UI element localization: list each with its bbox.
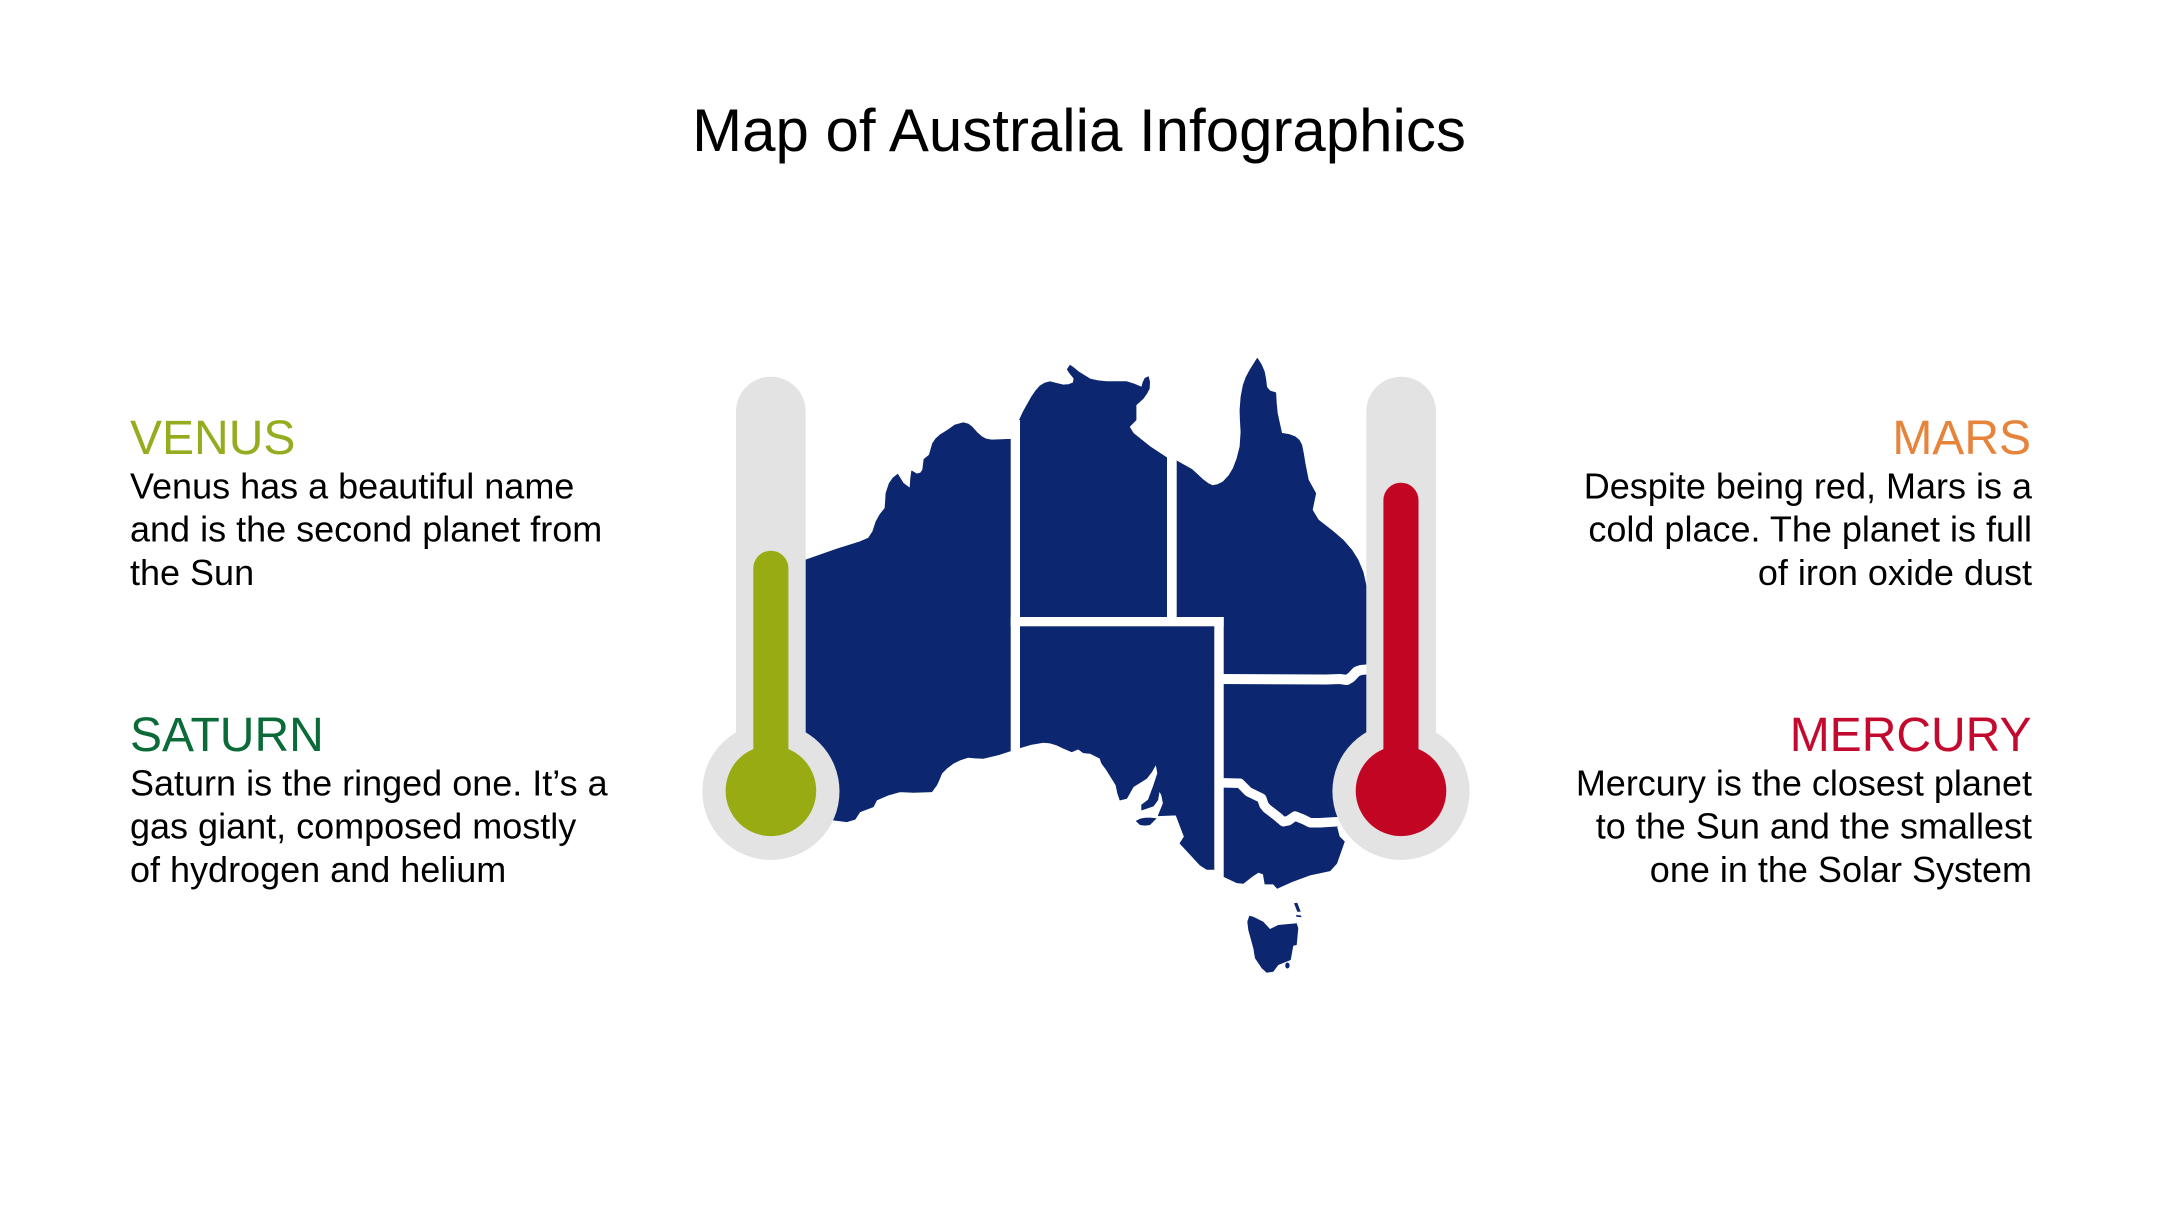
mercury bulb <box>726 746 816 836</box>
thermometer tube <box>736 377 806 827</box>
mercury bulb <box>1356 746 1446 836</box>
text block: Mercury: MERCURY <box>1790 709 2032 762</box>
text block: Mercury: Mercury is the closest planet <box>1576 762 2032 804</box>
text block: Mars: MARS <box>1892 412 2031 465</box>
text block: Venus: Venus has a beautiful name <box>130 466 574 506</box>
text block: Venus: VENUS <box>130 412 295 465</box>
thermometer: Mars / Mercury (right) <box>1332 377 1470 860</box>
map of Australia <box>790 358 1400 973</box>
thermometer: Venus / Saturn (left) <box>702 377 840 860</box>
text block: Mars <box>1584 412 2033 593</box>
mercury column <box>753 551 788 801</box>
thermometer bulb <box>1332 723 1470 860</box>
title: Map of Australia Infographics <box>692 97 1466 164</box>
text block: Mercury <box>1576 709 2032 890</box>
text block: Mars: cold place. The planet is full <box>1588 509 2032 550</box>
text block: Saturn: SATURN <box>130 709 324 762</box>
text block: Saturn: Saturn is the ringed one. It’s a <box>130 762 609 804</box>
thermometer tube <box>1366 377 1436 827</box>
text block: Saturn <box>130 709 609 890</box>
Kangaroo Island <box>1136 818 1157 826</box>
state borders <box>1011 420 1372 880</box>
text block: Venus: and is the second planet from <box>130 509 602 550</box>
text block: Mercury: one in the Solar System <box>1650 849 2032 890</box>
text block: Venus <box>130 412 602 593</box>
thermometer bulb <box>702 723 840 860</box>
text block: Mars: Despite being red, Mars is a <box>1584 466 2033 506</box>
text block: Venus: the Sun <box>130 552 254 593</box>
text block: Saturn: of hydrogen and helium <box>130 849 506 890</box>
Tasmania <box>1247 916 1298 973</box>
text block: Mars: of iron oxide dust <box>1758 552 2032 593</box>
mercury column <box>1383 483 1418 803</box>
text block: Mercury: to the Sun and the smallest <box>1596 806 2032 847</box>
mainland silhouette <box>790 358 1400 888</box>
small islands <box>1285 903 1302 969</box>
text block: Saturn: gas giant, composed mostly <box>130 806 576 847</box>
